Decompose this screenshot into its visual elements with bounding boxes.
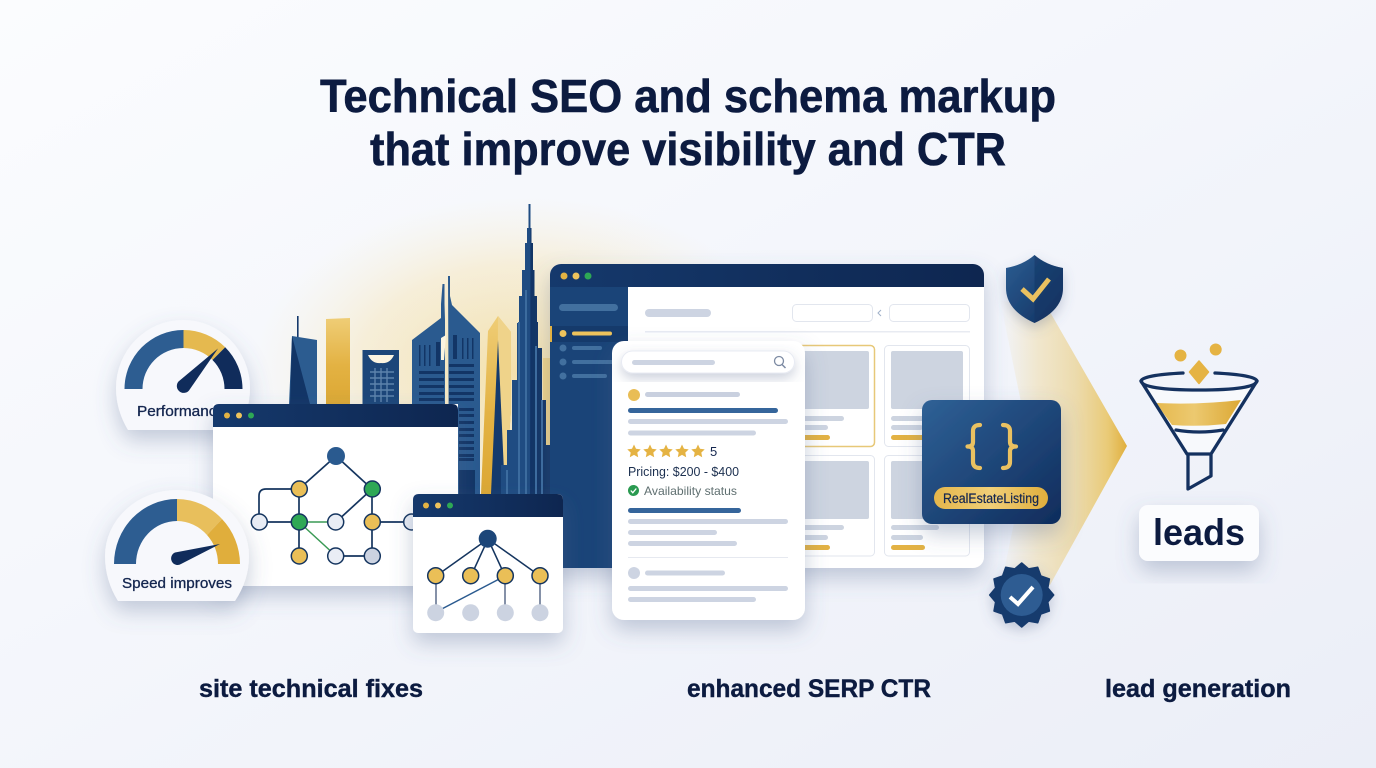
site graph [251, 447, 420, 564]
needle [177, 348, 218, 393]
panel: gauge performance [116, 320, 250, 430]
icon: lead funnel [1141, 344, 1257, 489]
building: angled tower [289, 316, 317, 404]
building: notched tower [362, 350, 399, 404]
schema type pill: RealEstateListing [943, 491, 1039, 506]
building: gold spire [481, 316, 511, 494]
window header [413, 494, 563, 517]
search bar [622, 351, 794, 373]
title [320, 70, 1056, 175]
result lines [628, 389, 788, 436]
panel: gauge speed improves [105, 490, 249, 601]
title: that improve visibility and CTR [370, 123, 1006, 175]
sidebar [550, 287, 628, 568]
building: tall spire tower [501, 204, 552, 494]
icon: verified badge [990, 563, 1054, 627]
panel: technical site graph window [213, 404, 458, 586]
tree diagram [427, 530, 548, 621]
window header [550, 264, 984, 287]
needle [171, 544, 220, 565]
window header [213, 404, 458, 427]
label: site technical fixes: site technical fixes [199, 675, 423, 703]
panel: search result card [612, 341, 805, 620]
title: Technical SEO and schema markup [320, 70, 1056, 122]
building: twin towers [412, 276, 480, 494]
panel: tree hierarchy window [413, 494, 563, 633]
star rating: 5 [710, 444, 717, 459]
panel: main listing browser window [550, 264, 984, 568]
arrow: gold chevron toward funnel [1000, 300, 1127, 590]
availability status: Availability status [644, 484, 737, 498]
result lines lower [628, 508, 788, 602]
panel: schema card [922, 400, 1061, 524]
pricing text: Pricing: $200 - $400 [628, 465, 739, 479]
building: gold tower [326, 318, 350, 404]
star rating [627, 444, 717, 459]
label: enhanced SERP CTR: enhanced SERP CTR [687, 675, 931, 703]
listing cards grid [802, 344, 970, 556]
leads box: leads [1153, 512, 1245, 553]
icon: shield check [1006, 255, 1063, 323]
panel: gauge speed improves: Speed improves [122, 576, 232, 592]
content header [645, 304, 970, 332]
leads box [1139, 505, 1259, 561]
icon: curly braces [968, 425, 1016, 468]
panel: gauge performance: Performance [137, 404, 225, 420]
label: lead generation: lead generation [1105, 675, 1291, 703]
city skyline [289, 204, 552, 494]
